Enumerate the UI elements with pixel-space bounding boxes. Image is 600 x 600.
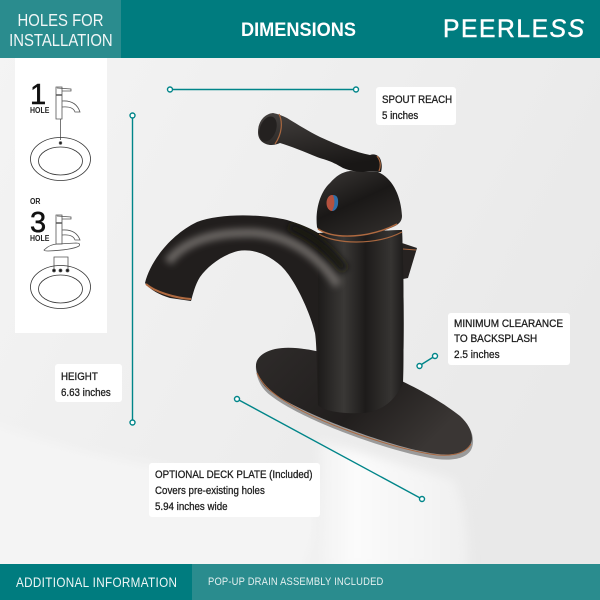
faucet photo xyxy=(145,113,474,460)
label: deck plate xyxy=(149,463,320,517)
label: minimum clearance: TO BACKSPLASH xyxy=(454,333,537,345)
title: dimensions: DIMENSIONS xyxy=(241,20,356,41)
one hole number: 1 xyxy=(30,79,46,111)
heading box: holes for installation: HOLES FOR xyxy=(18,10,103,30)
arrow: deck plate width xyxy=(234,396,424,502)
footer bar xyxy=(0,564,600,600)
icon: one hole faucet and sink xyxy=(30,86,91,181)
faucet body and spout xyxy=(140,210,410,420)
drain lever xyxy=(402,243,417,279)
label: minimum clearance: 2.5 inches xyxy=(454,349,500,361)
handle dome xyxy=(317,171,402,237)
label: height: 6.63 inches xyxy=(61,387,111,399)
footer heading xyxy=(0,564,192,600)
label: spout reach xyxy=(376,87,456,125)
logo: Peerless: PEERLESS xyxy=(443,15,586,43)
three hole label: HOLE xyxy=(30,234,49,243)
icon: three hole faucet and sink xyxy=(30,214,91,309)
three hole number: 3 xyxy=(30,207,46,239)
label: minimum clearance: MINIMUM CLEARANCE xyxy=(454,318,563,330)
heading box: holes for installation xyxy=(0,0,121,58)
label: deck plate: OPTIONAL DECK PLATE (Included) xyxy=(155,469,312,481)
label: deck plate: 5.94 inches wide xyxy=(155,501,228,513)
label: height xyxy=(55,364,122,402)
header bar xyxy=(0,0,600,58)
label: minimum clearance xyxy=(448,313,570,365)
label: spout reach: 5 inches xyxy=(382,110,418,122)
label: deck plate: Covers pre-existing holes xyxy=(155,485,265,497)
footer heading: ADDITIONAL INFORMATION xyxy=(16,574,177,590)
label: spout reach: SPOUT REACH xyxy=(382,94,452,106)
deck plate xyxy=(256,348,473,460)
heading box: holes for installation: INSTALLATION xyxy=(9,30,113,50)
or label: OR xyxy=(30,197,40,206)
panel: hole options xyxy=(15,58,107,333)
one hole label: HOLE xyxy=(30,106,49,115)
arrow: backsplash clearance xyxy=(417,354,438,368)
label: height: HEIGHT xyxy=(61,371,98,383)
lever handle xyxy=(256,113,382,172)
arrow: spout reach xyxy=(168,87,358,92)
hot and cold indicator xyxy=(326,195,338,211)
arrow: height xyxy=(130,113,135,425)
footer text: POP-UP DRAIN ASSEMBLY INCLUDED xyxy=(208,576,384,588)
